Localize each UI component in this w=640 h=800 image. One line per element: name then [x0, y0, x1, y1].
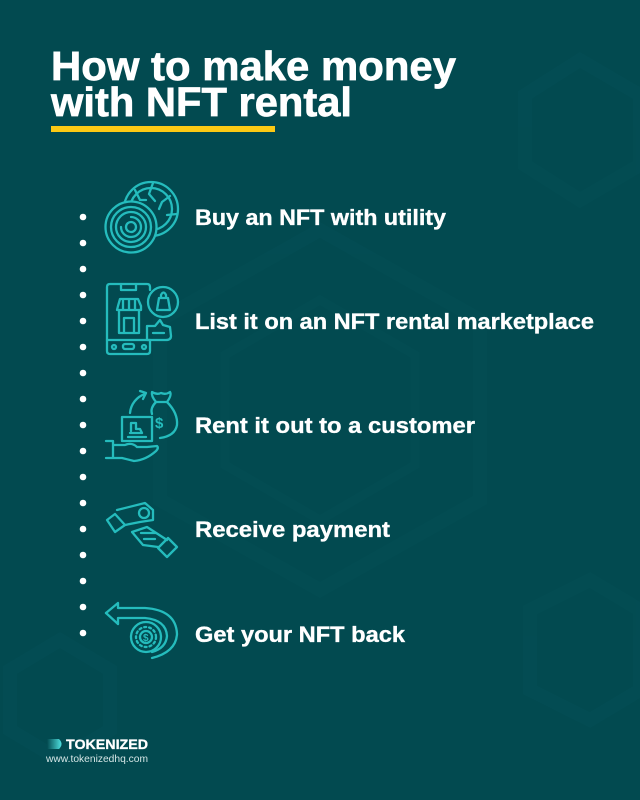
icon: arrow returning with coin: $	[143, 633, 149, 644]
title: How to make money	[51, 43, 456, 89]
dotted timeline	[80, 214, 86, 636]
icon: hands exchanging payment	[107, 503, 177, 557]
icon: NFT coins	[106, 182, 178, 252]
footer logo: TOKENIZED	[66, 737, 148, 752]
icon: rent out, hand with artwork and money bag: $	[155, 415, 164, 432]
step labels: Buy an NFT with utility	[195, 205, 447, 230]
footer logo: www.tokenizedhq.com	[45, 753, 148, 765]
step labels: Rent it out to a customer	[195, 413, 475, 438]
title	[50, 43, 456, 125]
icon: phone with shop	[107, 284, 178, 354]
step labels: Get your NFT back	[195, 622, 406, 647]
step labels: List it on an NFT rental marketplace	[195, 309, 594, 334]
icon: rent out, hand with artwork and money bag	[106, 391, 177, 461]
footer logo	[45, 737, 148, 765]
step labels	[195, 205, 594, 647]
step labels: Receive payment	[195, 517, 391, 542]
title: with NFT rental	[50, 79, 352, 125]
title underline	[51, 126, 275, 132]
icon: arrow returning with coin	[106, 603, 177, 658]
